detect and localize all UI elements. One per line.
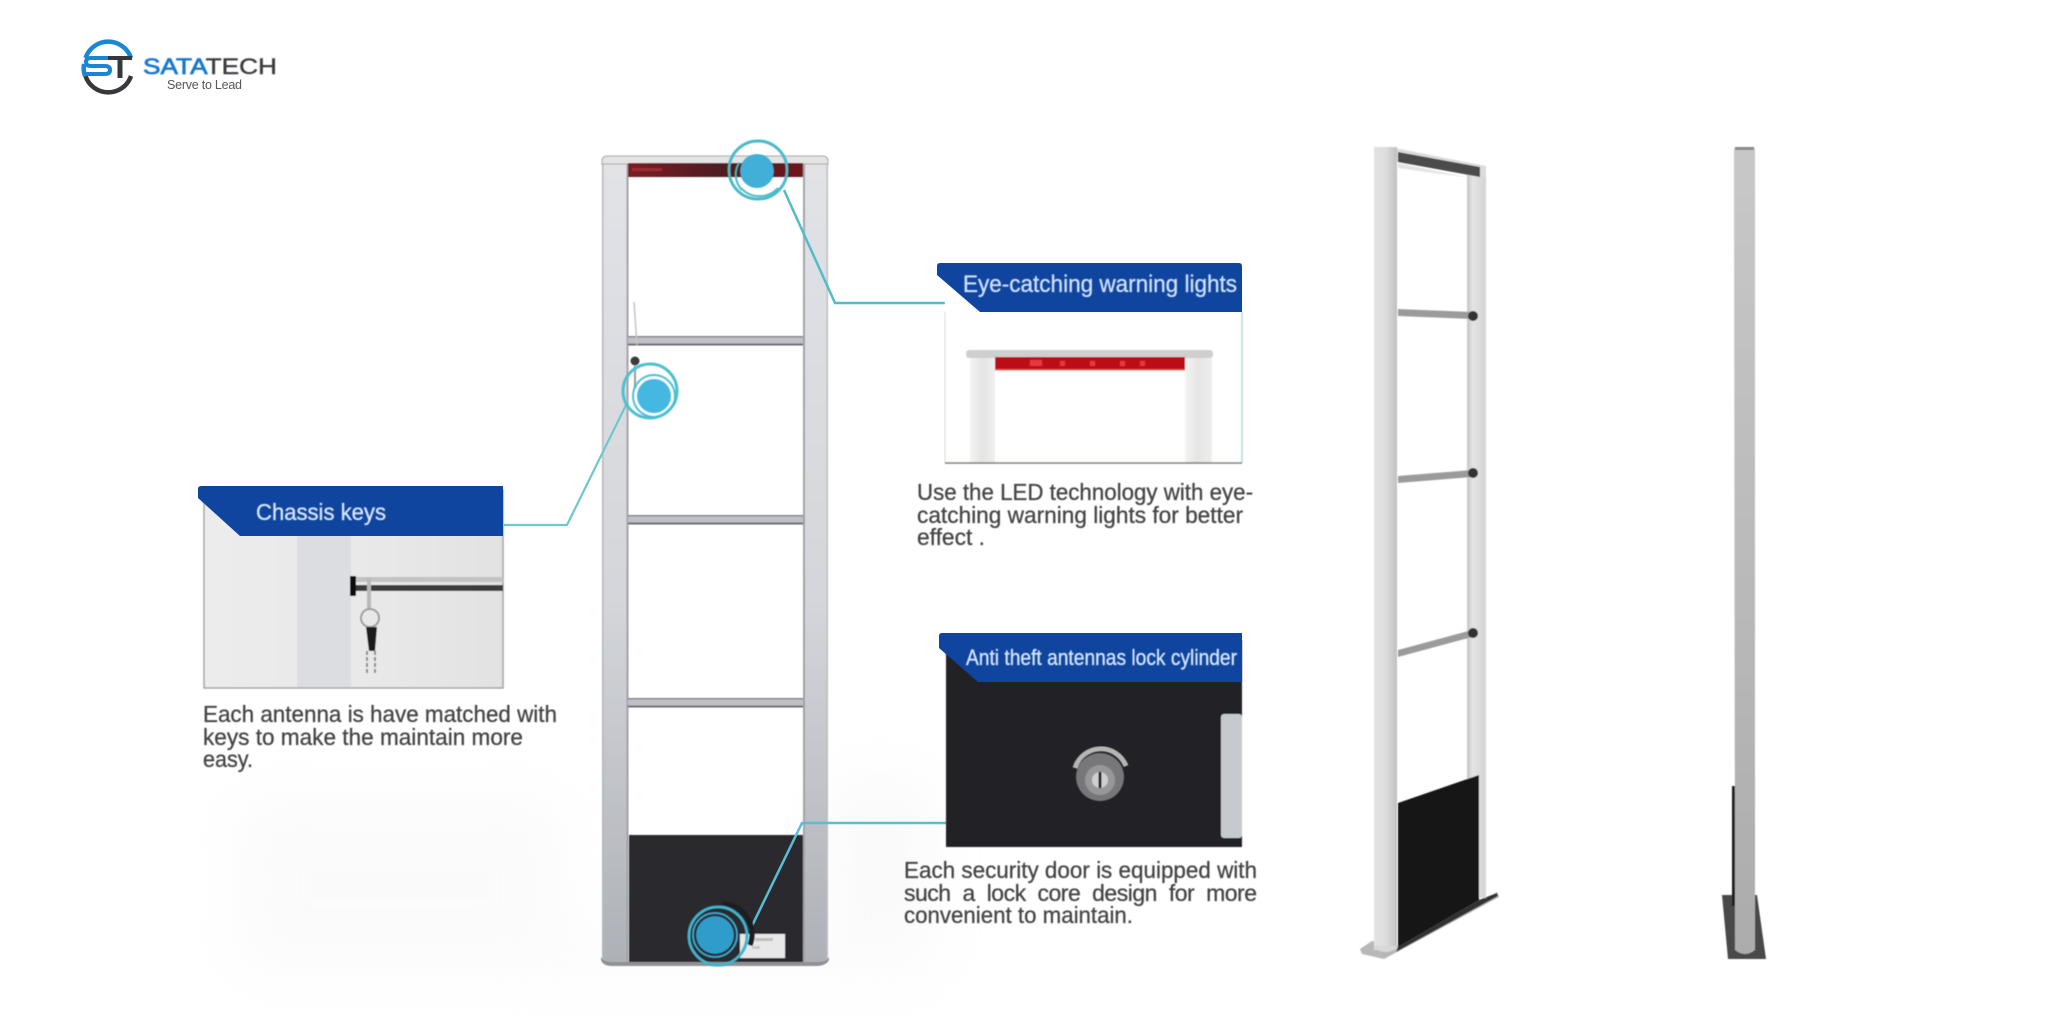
rail top (1398, 309, 1472, 319)
rail lower (1398, 630, 1472, 657)
rail knob top (1468, 311, 1478, 321)
logo mark (84, 42, 132, 92)
panel header (198, 486, 503, 536)
background haze (240, 780, 940, 980)
description (203, 701, 557, 772)
header text: Chassis keys (256, 499, 386, 525)
panel: eye-catching warning lights (917, 263, 1253, 550)
marker: lock cylinder (689, 904, 752, 965)
description: Each antenna is have matched with (203, 701, 557, 727)
description (917, 479, 1253, 550)
serial label (740, 934, 785, 958)
description (904, 857, 1257, 928)
description: Use the LED technology with eye- (917, 479, 1253, 505)
leader line: chassis keys (504, 405, 626, 525)
rail middle (1398, 470, 1472, 483)
description: effect . (917, 524, 985, 550)
panel header (939, 633, 1242, 682)
leader line: warning lights (784, 190, 945, 303)
key on rail (630, 302, 640, 388)
black lower panel (629, 835, 803, 962)
header text: Eye-catching warning lights (963, 271, 1237, 298)
base plate (1360, 892, 1499, 959)
left post (602, 158, 628, 962)
right post (803, 158, 828, 962)
logo tagline: Serve to Lead (167, 78, 242, 92)
leader line: lock cylinder (750, 823, 946, 930)
post cap (1735, 147, 1754, 150)
base plate front band (1396, 893, 1498, 952)
LED bar (628, 163, 803, 177)
marker: chassis keys (623, 364, 677, 418)
rail knob lower (1468, 628, 1478, 638)
black panel (1398, 775, 1479, 947)
rail three (628, 698, 803, 708)
rail one (628, 336, 803, 346)
right post (1467, 168, 1486, 898)
top cap (602, 156, 828, 164)
description: such a lock core design for more (904, 880, 1257, 906)
black strip (1732, 786, 1736, 906)
panel header (937, 263, 1242, 312)
left post (1374, 147, 1397, 950)
header text: Anti theft antennas lock cylinder (966, 645, 1237, 670)
door frame (601, 156, 829, 966)
description: easy. (203, 746, 253, 772)
main antenna door with callouts (504, 141, 946, 966)
marker: warning lights (729, 141, 787, 199)
product: side view (1722, 147, 1766, 959)
post (1734, 147, 1755, 954)
logo: Satatech (84, 42, 277, 92)
rail two (628, 515, 803, 524)
description: Each security door is equipped with (904, 857, 1257, 883)
base plate (1722, 895, 1766, 959)
lock cylinder (1075, 749, 1126, 801)
top bar (1374, 147, 1486, 177)
panel photo (946, 640, 1242, 847)
logo wordmark: SATA TECH (143, 54, 277, 79)
rail knob middle (1468, 468, 1478, 478)
panel: anti theft antennas lock cylinder (904, 633, 1257, 928)
description: keys to make the maintain more (203, 724, 523, 750)
panel: chassis keys (198, 486, 557, 772)
panel photo (204, 490, 503, 688)
base rim (601, 957, 829, 966)
description: catching warning lights for better (917, 502, 1243, 528)
product: angled view (1360, 147, 1499, 959)
description: convenient to maintain. (904, 902, 1133, 928)
panel photo (945, 270, 1242, 463)
